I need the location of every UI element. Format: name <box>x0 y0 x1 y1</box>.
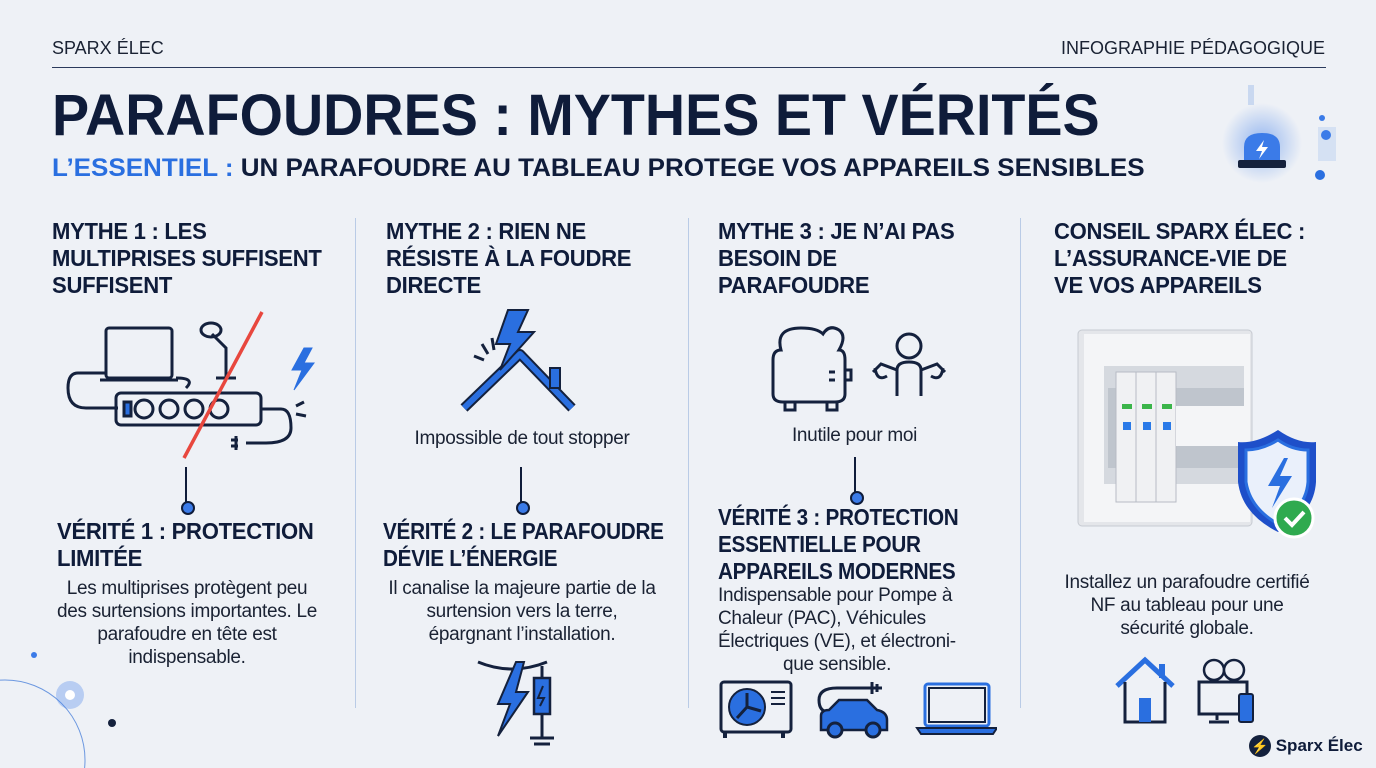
heading verite 1: VÉRITÉ 1 : PROTECTION <box>57 518 314 544</box>
heading verite 2: DÉVIE L’ÉNERGIE <box>383 545 557 571</box>
heading verite 2 <box>383 518 664 571</box>
icons: heat pump, EV, laptop <box>720 680 997 738</box>
connector <box>181 467 191 513</box>
image: electrical panel with shield <box>1078 330 1316 538</box>
heading verite 3: VÉRITÉ 3 : PROTECTION <box>718 504 958 530</box>
heading mythe 3: PARAFOUDRE <box>718 272 869 298</box>
icon: toaster and shrug <box>772 326 946 412</box>
heading verite 3: ESSENTIELLE POUR <box>718 531 921 557</box>
panel: mythe 3 <box>718 218 997 738</box>
caption mythe 2: Impossible de tout stopper <box>414 428 630 449</box>
text verite 2: Il canalise la majeure partie de la surtension vers la terre, épargnant l’installation. <box>388 578 656 645</box>
text verite 3: Indispensable pour Pompe à <box>718 585 952 606</box>
text conseil: Installez un parafoudre certifié NF au tableau pour une sécurité globale. <box>1065 572 1309 639</box>
text verite 3 <box>718 585 956 675</box>
heading verite 1: LIMITÉE <box>57 545 142 571</box>
heading conseil: VE VOS APPAREILS <box>1054 272 1262 298</box>
heading mythe 1: MYTHE 1 : LES <box>52 218 207 244</box>
heading mythe 1 <box>52 218 322 298</box>
text verite 1: Les multiprises protègent peu des surtensions importantes. Le parafoudre en tête est indispensable. <box>57 578 317 668</box>
icon: surge protector to ground <box>478 660 554 746</box>
icons: house and family devices <box>1115 656 1254 724</box>
decoration: orbit <box>0 652 116 768</box>
heading verite 3 <box>718 504 958 584</box>
heading conseil: L’ASSURANCE-VIE DE <box>1054 245 1287 271</box>
heading mythe 2 <box>386 218 631 298</box>
subtitle: L’ESSENTIEL : UN PARAFOUDRE AU TABLEAU PROTEGE VOS APPAREILS SENSIBLES <box>52 154 1145 182</box>
icon: lightning on roof <box>460 309 576 412</box>
heading conseil: CONSEIL SPARX ÉLEC : <box>1054 218 1305 244</box>
heading verite 3: APPAREILS MODERNES <box>718 558 955 584</box>
heading verite 2: VÉRITÉ 2 : LE PARAFOUDRE <box>383 518 664 544</box>
heading mythe 3: BESOIN DE <box>718 245 837 271</box>
heading mythe 2: DIRECTE <box>386 272 481 298</box>
connector <box>850 457 860 503</box>
heading mythe 3 <box>718 218 954 298</box>
panel: conseil <box>1054 218 1363 757</box>
connector <box>516 467 526 513</box>
text verite 3: Électriques (VE), et électroni- <box>718 631 956 652</box>
header brand: SPARX ÉLEC <box>52 38 164 58</box>
heading conseil <box>1054 218 1305 298</box>
logo: Sparx Élec <box>1276 736 1363 755</box>
text verite 3: que sensible. <box>783 654 891 675</box>
logo: ⚡ <box>1251 738 1269 754</box>
caption mythe 3: Inutile pour moi <box>792 425 917 446</box>
heading mythe 1: SUFFISENT <box>52 272 172 298</box>
text verite 3: Chaleur (PAC), Véhicules <box>718 608 926 629</box>
heading mythe 3: MYTHE 3 : JE N’AI PAS <box>718 218 954 244</box>
icon: alarm light <box>1226 85 1336 180</box>
panel: mythe 2 <box>383 218 664 746</box>
heading mythe 1: MULTIPRISES SUFFISENT <box>52 245 322 271</box>
logo <box>1249 735 1363 757</box>
heading verite 1 <box>57 518 314 571</box>
header label: INFOGRAPHIE PÉDAGOGIQUE <box>1061 38 1325 58</box>
title: PARAFOUDRES : MYTHES ET VÉRITÉS <box>52 83 1100 148</box>
heading mythe 2: MYTHE 2 : RIEN NE <box>386 218 586 244</box>
icon: power strip crossed <box>66 311 315 459</box>
panel: mythe 1 <box>52 218 322 668</box>
heading mythe 2: RÉSISTE À LA FOUDRE <box>386 245 631 271</box>
